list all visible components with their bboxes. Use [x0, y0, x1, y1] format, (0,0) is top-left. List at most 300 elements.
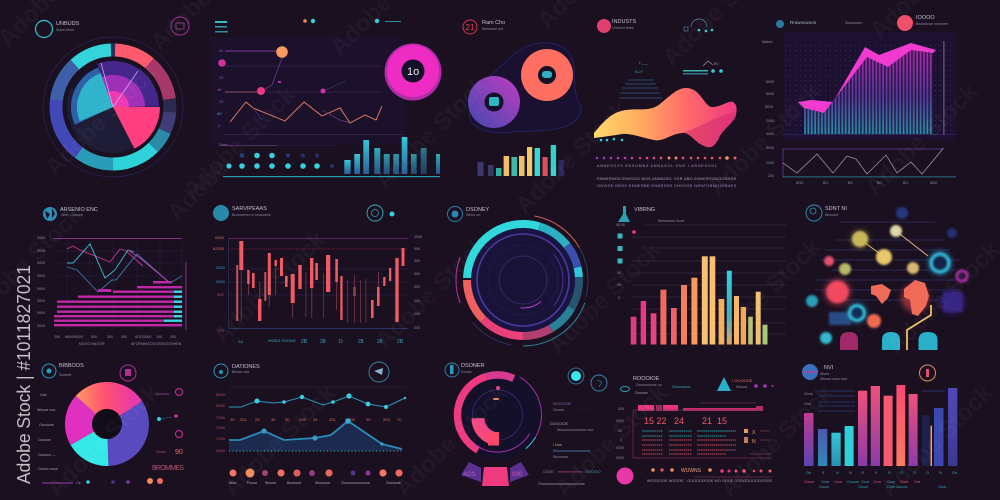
side text: · · · · ·: [579, 408, 589, 412]
chart: bubbles and lines: 20: [219, 75, 224, 80]
separator lines: Direv: [219, 142, 228, 147]
watermark: Adobe Stock: [218, 379, 341, 500]
frame: [783, 32, 956, 140]
lower labels: Oooe: [938, 485, 946, 489]
text rows: ANNESOXS ENSOMNA ANNUOOL ENO I ANNEOVOL: [597, 164, 717, 168]
axis lines: [229, 386, 406, 388]
right glyphs: N: [752, 439, 756, 445]
side text: OOOOO: [585, 469, 601, 474]
x labels: 100: [156, 335, 162, 339]
panel: radial pie gauge: [32, 17, 194, 188]
gauge: [437, 355, 558, 475]
gauge base: 000: [512, 472, 523, 478]
text rows: ONVISE EBOX ENNERBE ENNESEN CHOOSE NENFORMOOINVES: [597, 184, 736, 188]
y axis labels: 2000: [766, 119, 774, 123]
chart: bubbles and lines: 20: [219, 99, 224, 104]
bars: [804, 385, 957, 466]
text: twin donuts sub-label: Mestrooe ent: [482, 27, 503, 31]
icon: top right dots: [684, 19, 713, 32]
watermark: Adobe Stock: [178, 81, 301, 204]
labels and legend: 00: [617, 283, 621, 287]
text: badge sub-label: Bwoolrooe nvenoee: [916, 22, 948, 26]
icon: header number badge: 21: [466, 23, 475, 32]
y axis labels: 5000: [766, 92, 774, 96]
panel: donut chart: [37, 363, 184, 485]
y labels: 2000: [216, 265, 226, 270]
right glyphs: X: [752, 430, 756, 436]
lower labels: Oooe: [873, 480, 881, 484]
left labels: [37, 393, 58, 471]
watermark: Adobe Stock: [510, 96, 633, 219]
labels: 000: [414, 259, 420, 263]
status dot: [390, 212, 394, 216]
side credit text: Adobe Stock | #1011827021: [13, 265, 34, 484]
line chart: BO: [903, 181, 908, 185]
watermark: Adobe Stock: [40, 58, 163, 181]
panel: data table: [616, 376, 774, 484]
icon: top right circle: [171, 17, 189, 35]
watermark: Adobe Stock: [703, 78, 826, 201]
heading: DSONER: [461, 363, 485, 369]
icon: right ring: [367, 205, 383, 221]
legend row: [42, 478, 163, 485]
icon: header mark: [776, 20, 784, 28]
x labels: O: [913, 471, 916, 475]
gridlines: [632, 225, 786, 334]
connectors: [860, 231, 928, 257]
right markers: Oooooo: [155, 391, 170, 396]
labels: 000: [414, 247, 420, 251]
lower labels: Ooooe: [858, 485, 868, 489]
left labels: Ooooo oooe: [38, 467, 58, 471]
lower labels: Ooee oooooe: [887, 485, 908, 489]
icon: header: [802, 364, 818, 380]
labels: 000: [414, 272, 420, 276]
chart: orange line: [230, 102, 382, 123]
side line: [184, 262, 187, 330]
y axis labels: 5000: [765, 105, 773, 109]
icon: header number badge: [463, 20, 477, 34]
x labels: 300: [107, 335, 113, 339]
icon: globe: [43, 207, 57, 221]
labels: 2B: [301, 339, 308, 345]
chart: bubbles and lines: 46: [217, 87, 222, 92]
x labels: N: [849, 471, 852, 475]
horizontal bars: [54, 281, 182, 326]
x labels: O: [861, 471, 864, 475]
numbers: 15 22: [644, 416, 667, 426]
panel: concentric ring gauge: [434, 191, 612, 369]
x labels: 880005000: [65, 335, 83, 339]
sub-label: Coooe: [461, 370, 472, 374]
number row: 20: [366, 417, 371, 422]
y axis labels: 5000: [766, 80, 774, 84]
right glyphs: [744, 429, 772, 454]
y labels: 8000: [216, 392, 226, 397]
y labels: Oooe: [804, 392, 813, 396]
chart background: [210, 37, 405, 145]
x labels: 500: [91, 335, 97, 339]
heading: SARVIPEAAS: [232, 206, 267, 212]
footer text: WOOOOOE WOOOE · OOOOOOOOE WO OOOE OOOOOOOOOOOOE: [647, 479, 773, 483]
y labels: 0000: [215, 235, 225, 240]
y labels: 0000: [37, 249, 45, 253]
labels: 2A: [238, 339, 243, 344]
labels: WOES SSONG: [268, 338, 296, 343]
dot row: [230, 468, 403, 478]
label row: [229, 481, 401, 485]
number row: 200: [383, 417, 390, 422]
lower labels: Oooe: [900, 480, 908, 484]
icon: magenta donut: 1o: [407, 66, 419, 78]
y labels: 4000: [216, 448, 226, 453]
base line: [223, 176, 440, 177]
y labels: [616, 407, 624, 460]
panel: line and area charts: [214, 362, 406, 485]
panel: twin donuts: [463, 20, 581, 176]
yellow arrow path: [907, 305, 931, 350]
glow nodes: [806, 207, 968, 344]
side text: OOOOOE: [553, 401, 572, 406]
panel: wave chart: [594, 19, 737, 188]
sub-labels: Oooooooooe oo: [636, 383, 662, 387]
lower labels: Oooe: [861, 480, 869, 484]
y axis labels: 200: [768, 174, 774, 178]
sub-label: Sooeee: [59, 373, 71, 377]
watermark: Adobe Stock: [715, 379, 838, 500]
left labels: Oooooe: [38, 438, 51, 442]
chart: bubbles and lines: [217, 46, 380, 128]
side text: OOOE: [543, 470, 554, 474]
icon: coral badge: [597, 19, 611, 33]
icon: cyan mark: [620, 386, 630, 392]
gauge base: [461, 462, 529, 486]
dots: [226, 153, 334, 169]
chart area: [783, 41, 956, 135]
side text: DOOOOE: [550, 421, 568, 426]
lower labels: Oooe: [887, 480, 895, 484]
labels: 000: [414, 312, 420, 316]
icon: header: [213, 205, 229, 221]
labels: 28: [358, 339, 364, 345]
icon: header: [214, 364, 228, 378]
labels: 2000: [414, 235, 422, 239]
x labels: AFORMMOOGORSSOONHEN: [131, 342, 182, 346]
dot row: [596, 156, 736, 160]
axes: [228, 238, 408, 329]
y axis labels: 3000: [766, 146, 774, 150]
side text: Ooooooooooooooooooooooe: [538, 482, 585, 486]
labels: 2B: [397, 339, 404, 345]
bar chart: [478, 145, 564, 176]
bar end caps: [164, 290, 182, 322]
text: second heading: Susouraon: [845, 21, 862, 25]
y labels: 0000: [616, 446, 624, 450]
y labels: 00: [618, 429, 622, 433]
icon: flask: [618, 206, 630, 222]
heading: ARSENIO ENC: [60, 207, 98, 213]
watermark: Adobe Stock: [875, 379, 998, 500]
heading: ROOOIOE: [633, 376, 660, 382]
watermark: Adobe Stock: [390, 379, 513, 500]
text: badge heading: IOOOO: [916, 15, 935, 21]
dotted grid: [784, 45, 954, 135]
soft halo behind nodes: [824, 230, 964, 323]
text: right heading: I OOOOOE: [732, 378, 753, 383]
panel: line and bubble chart: [210, 19, 442, 177]
lower labels: Oooe: [834, 480, 842, 484]
x labels: MOOO BNOOR: [79, 342, 105, 346]
side text: Wooooooooooooe ooo: [557, 428, 593, 432]
chart: bubbles and lines: -0: [217, 123, 221, 128]
ring icon: [591, 375, 607, 391]
x labels: 0: [875, 471, 877, 475]
x labels: 200: [54, 335, 60, 339]
sub-label: Wnn. Cnooes: [61, 213, 83, 217]
y labels: 7000: [216, 425, 226, 430]
sub-label: Wnoe oo: [466, 213, 480, 217]
numbers: 21: [702, 416, 712, 426]
number row: 205: [299, 417, 306, 422]
sub-label: Bnooe ooe: [232, 370, 249, 374]
scan lines: [815, 222, 965, 300]
footer text: [647, 477, 773, 483]
sub-labels: Oooooe: [635, 391, 648, 395]
lower labels: Oooe: [821, 480, 829, 484]
labels and legend: 0: [618, 296, 620, 300]
watermark: Adobe Stock: [370, 71, 493, 194]
arches: [840, 332, 938, 350]
panel: map with glowing nodes: [806, 205, 968, 350]
y labels: 0000: [37, 299, 45, 303]
y labels: 0000: [37, 274, 45, 278]
label row: Woooooe: [315, 481, 330, 485]
x labels: 300: [121, 335, 127, 339]
y labels: 0: [620, 438, 622, 442]
pink band: [638, 403, 763, 411]
line chart: BO: [848, 181, 853, 185]
mini labels: L___: [639, 60, 649, 65]
sub-labels: Oooooooo: [672, 384, 691, 389]
watermark: Adobe Stock: [42, 379, 165, 500]
y labels: 500: [217, 292, 224, 297]
number row: 30: [285, 417, 290, 422]
side text: [538, 401, 601, 486]
label row: Boooooe: [287, 481, 301, 485]
watermark: Adobe Stock: [208, 226, 331, 349]
cyan circle: [568, 368, 584, 384]
sub-label: Wnooee: [825, 213, 838, 217]
x labels: N: [836, 471, 839, 475]
number row: 201: [240, 417, 247, 422]
label row: Ooooooe: [386, 481, 401, 485]
legend row: Oe: [76, 481, 81, 485]
faint grid: [818, 391, 945, 411]
heading: twin donuts: Ram Cho: [482, 20, 505, 26]
heading: DATIONES: [232, 364, 260, 370]
x labels: N: [939, 471, 942, 475]
side text: / Ooo: [553, 443, 562, 447]
sub-labels: [635, 383, 691, 395]
donut: [67, 384, 147, 464]
heading: radial panel: UNBUDS: [56, 21, 80, 27]
x labels: 8OOO000: [135, 335, 151, 339]
panel: magenta area chart: [762, 15, 956, 185]
watermark: Adobe: [162, 154, 234, 226]
right markers: [152, 388, 184, 472]
labels: 28: [320, 339, 326, 345]
lower labels: Ooooe: [819, 485, 829, 489]
right markers: BROMMES: [152, 465, 184, 472]
y labels: 0000: [37, 324, 45, 328]
heading: VIBRNG: [634, 207, 655, 213]
watermark: Adobe Stock: [703, 233, 826, 356]
status row: WUWNS: [681, 468, 702, 474]
number row: 70: [397, 417, 402, 422]
panel: candlestick chart: [213, 205, 422, 345]
icon: header ring: [36, 20, 52, 38]
mini labels: BV: [714, 62, 719, 66]
y labels: 0000: [616, 456, 624, 460]
bar chart: [344, 137, 440, 174]
top axis: [53, 237, 182, 240]
magenta circle: [616, 468, 634, 484]
labels and legend: 00: [617, 271, 621, 275]
heading: SDNT NI: [825, 206, 847, 212]
wave lines: [67, 244, 182, 292]
left labels: Ooooooe: [39, 423, 54, 427]
chart: ring and pie: [32, 26, 194, 188]
mini labels: [619, 60, 723, 98]
candles: [236, 241, 404, 323]
blob background: [469, 43, 581, 133]
icon: magenta donut: [384, 44, 442, 100]
numbers: [644, 416, 727, 426]
x labels: O: [926, 471, 929, 475]
panel: gradient bar chart: [616, 206, 786, 344]
frame: [633, 410, 772, 458]
chart: bubbles and lines: 80: [217, 111, 222, 116]
panel: colored bar chart: [802, 364, 957, 489]
x labels: [806, 471, 957, 475]
watermark: Adobe Stock: [860, 78, 983, 201]
left labels: Ooe: [40, 393, 47, 397]
y labels: [804, 392, 813, 406]
x labels: Oe: [952, 471, 957, 475]
right markers: Oooe: [156, 449, 167, 454]
label row: Foooe: [247, 481, 257, 485]
sub-label: Woooesoo Sooe: [658, 219, 685, 223]
lower labels: Oooooe: [847, 480, 859, 484]
x labels: O: [888, 471, 891, 475]
number row: 28: [313, 417, 318, 422]
y labels: Ooe: [804, 402, 811, 406]
heading: NVI: [824, 365, 834, 371]
x labels: O: [900, 471, 903, 475]
labels and legend: [616, 223, 636, 300]
number row: 30: [271, 417, 276, 422]
x labels: 0: [822, 471, 824, 475]
labels: [238, 235, 422, 345]
y axis labels: Walmc: [762, 40, 773, 44]
donut: purple: [468, 76, 520, 128]
labels: 000: [414, 299, 420, 303]
chart: bubbles and lines: 0s: [219, 48, 223, 53]
right markers: 90: [175, 449, 183, 456]
x labels: 300: [170, 335, 176, 339]
header marks: [215, 19, 401, 32]
label row: Woooe: [265, 481, 276, 485]
watermark: Adobe Stock: [543, 236, 666, 359]
icon: coral badge: [897, 15, 913, 31]
y labels: 0000: [37, 261, 45, 265]
line chart: BO: [823, 181, 828, 185]
right dots: [754, 384, 774, 388]
left labels: Oooooo —: [38, 453, 56, 457]
icon: right ring: [120, 365, 136, 381]
sub-label: Woee: [820, 372, 829, 376]
area wave: [594, 88, 737, 147]
icon: header: [806, 205, 822, 221]
icon: right ring: [369, 362, 389, 382]
text rows: [597, 164, 736, 188]
side text: Ooooe: [553, 408, 564, 412]
line chart: BO: [877, 181, 882, 185]
y labels: 0000: [37, 311, 45, 315]
y labels: [216, 392, 226, 453]
y axis labels: 4000: [766, 132, 774, 136]
y labels: 000: [618, 407, 624, 411]
upper line chart: [229, 393, 406, 409]
side text: Woooooe: [553, 455, 568, 459]
number row: 23: [255, 417, 260, 422]
y labels: [37, 236, 45, 328]
y labels: 0000: [616, 419, 624, 423]
y axis labels: [762, 40, 774, 178]
text: right note: Woooe: [736, 385, 747, 389]
text: wave sub-label: Unereot frnee: [612, 26, 634, 30]
number row: 20: [230, 417, 235, 422]
numbers: 15: [717, 416, 727, 426]
y labels: [213, 235, 226, 333]
icon: header: [448, 206, 462, 222]
icon: header: [445, 363, 459, 377]
data rows: [642, 431, 736, 454]
y labels: 62300: [213, 246, 225, 251]
area chart: [229, 418, 403, 451]
line chart: ABO: [930, 181, 938, 185]
y axis labels: 2000: [766, 161, 774, 165]
number row: 2000: [346, 417, 356, 422]
text: radial sub-label: Sumn leoin: [56, 28, 74, 32]
ring gauge: [434, 191, 612, 369]
line chart: ANS: [796, 181, 804, 185]
lower labels: Ooooe: [804, 480, 814, 484]
labels: 000: [414, 326, 420, 330]
numbers: 24: [674, 416, 684, 426]
icon: cyan triangle: [717, 377, 731, 391]
icon: right ring: [920, 365, 936, 381]
label row: Woe: [229, 481, 236, 485]
side text: Wooooooooooooooooe: [553, 449, 590, 453]
lower labels: Ooe: [914, 480, 921, 484]
line chart: [783, 148, 956, 185]
map blobs: [871, 280, 929, 316]
heading: BIBBOOS: [59, 363, 84, 369]
y labels: 5000: [216, 403, 226, 408]
watermark: Adobe Stock: [550, 379, 673, 500]
mini labels: ILLY: [635, 69, 643, 74]
